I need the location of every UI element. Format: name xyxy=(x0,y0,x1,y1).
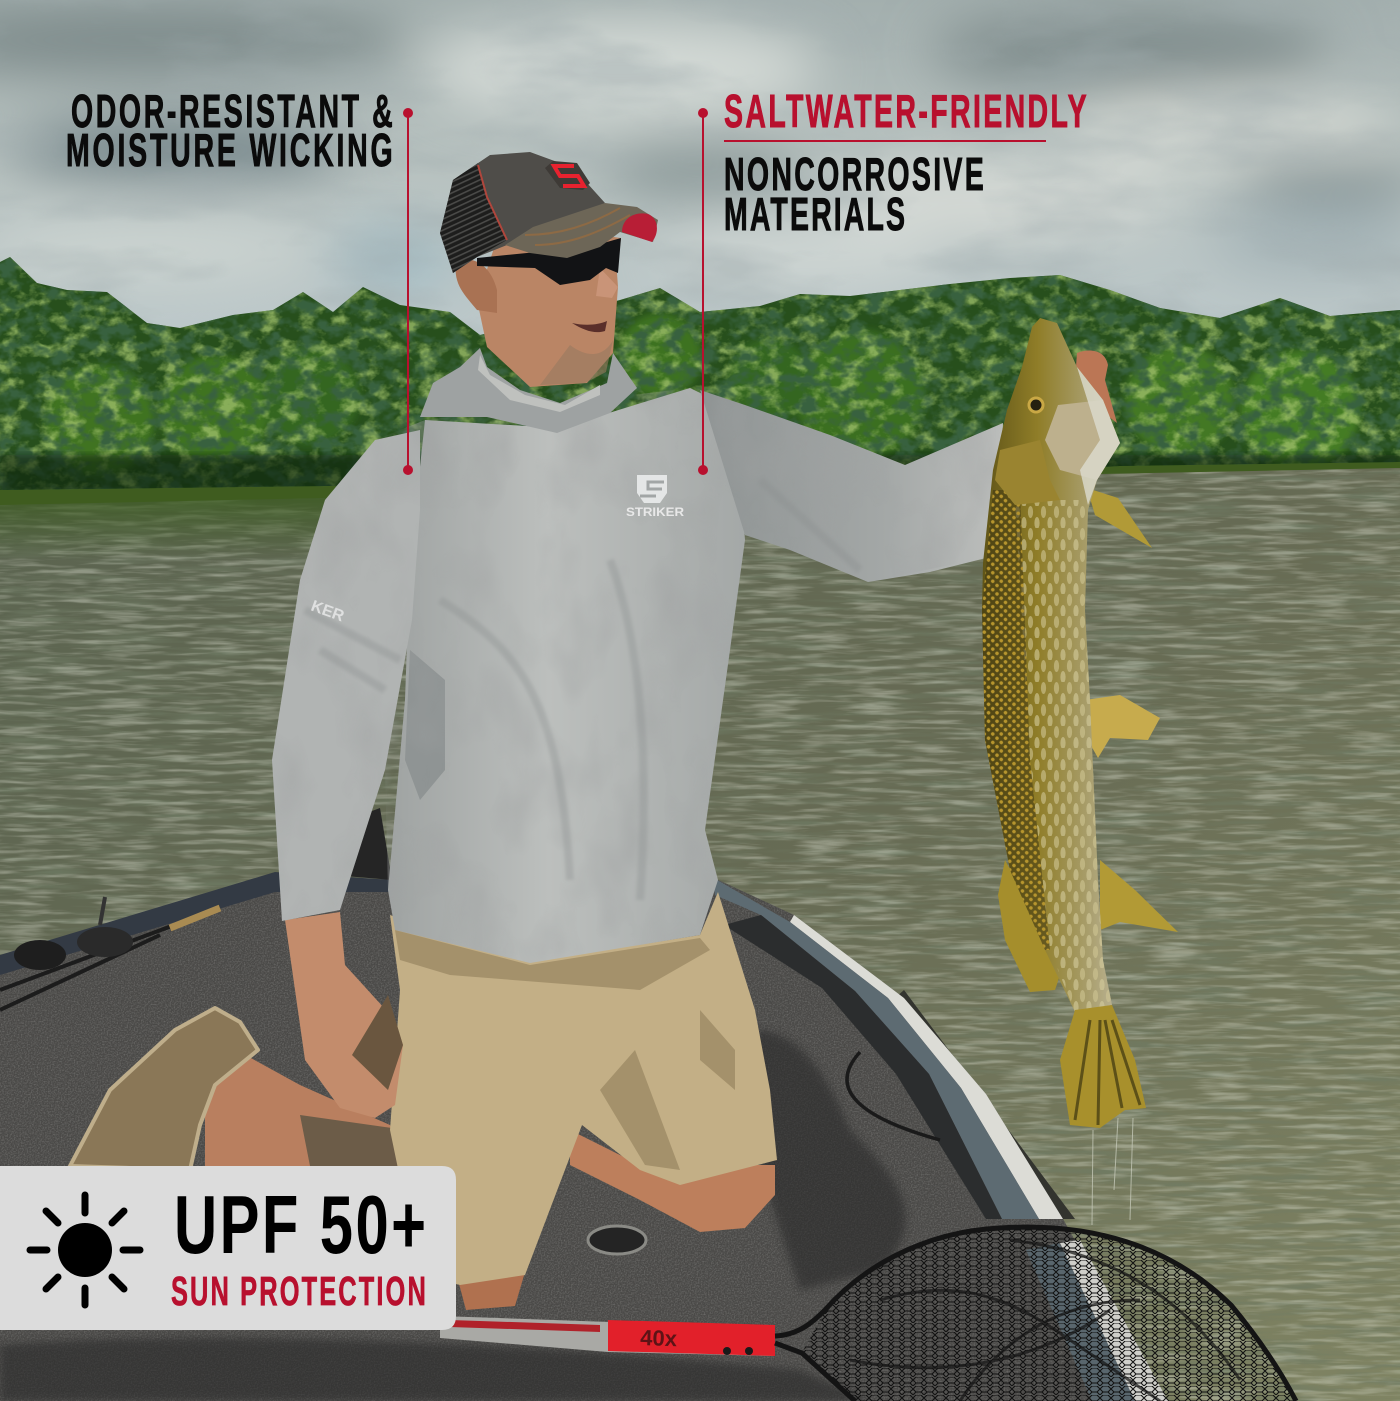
face shading xyxy=(540,340,613,385)
sunglasses xyxy=(477,238,621,285)
callout: noncorrosive materials text: NONCORROSIVE xyxy=(724,149,984,201)
deck hatch xyxy=(588,1226,646,1254)
dark side line xyxy=(895,990,1075,1219)
mesh side panel xyxy=(405,650,445,800)
stowed gear xyxy=(345,808,392,880)
callout: saltwater friendly heading: SALTWATER-FRIENDLY xyxy=(724,86,1087,138)
background: lake water xyxy=(0,465,1400,1401)
belly fin xyxy=(998,860,1065,992)
navy left gunwale xyxy=(0,872,392,975)
callout: noncorrosive materials text xyxy=(724,149,984,241)
back fin xyxy=(1087,488,1152,548)
icon: sun xyxy=(30,1195,140,1305)
hand holding fish xyxy=(1075,351,1117,423)
cap underside red xyxy=(622,213,657,242)
nose xyxy=(596,268,618,298)
fish pale belly edge xyxy=(1077,367,1120,505)
cap mesh back xyxy=(440,163,507,273)
deck shadow xyxy=(0,1030,906,1401)
bill stitching xyxy=(525,208,630,245)
callout: odor resistant heading xyxy=(66,86,393,177)
near shoe xyxy=(70,1008,258,1170)
ear xyxy=(456,259,497,313)
gaiter mesh fold xyxy=(478,355,600,412)
shirt torso xyxy=(388,388,745,963)
pectoral fin xyxy=(1085,695,1160,758)
callout underline xyxy=(724,140,1046,142)
near forearm and hand xyxy=(285,912,403,1118)
background: cloudy sky xyxy=(0,0,1400,340)
shirt folds xyxy=(305,480,860,900)
fishing rods on deck xyxy=(0,897,220,1010)
northern pike xyxy=(982,318,1178,1225)
panel: UPF sun protection badge xyxy=(0,1166,456,1330)
neck and face xyxy=(477,235,621,387)
khaki shorts xyxy=(390,892,777,1285)
background: far shoreline xyxy=(0,458,1400,505)
callout: odor resistant heading: ODOR-RESISTANT & xyxy=(71,86,393,138)
fish golden flank xyxy=(982,490,1050,950)
landing net xyxy=(775,1227,1296,1401)
rail lower section xyxy=(1026,1243,1161,1401)
fish eye xyxy=(1029,398,1043,412)
sleeve logo: KER xyxy=(309,598,347,625)
UPF rating: UPF 50+ xyxy=(174,1180,426,1271)
shirt chest logo xyxy=(626,475,684,519)
dark rail edge xyxy=(724,915,1002,1219)
tail rays xyxy=(1075,1020,1140,1125)
sun protection label: SUN PROTECTION xyxy=(171,1269,426,1315)
cap xyxy=(440,152,658,273)
angler xyxy=(70,152,1005,1310)
mouth xyxy=(572,321,607,332)
cap bill xyxy=(505,203,658,258)
fish tail xyxy=(1060,1005,1146,1128)
callout: noncorrosive materials text: MATERIALS xyxy=(724,189,905,241)
callout line: odor resistant xyxy=(403,108,413,475)
fish head plate xyxy=(1045,400,1120,480)
blue steel rail xyxy=(712,877,1039,1219)
shoe held in hand xyxy=(352,995,403,1090)
water drips xyxy=(1092,1118,1133,1225)
callout line: saltwater friendly xyxy=(698,108,708,475)
callout: odor resistant heading: MOISTURE WICKING xyxy=(66,125,393,177)
shorts shadow folds xyxy=(395,930,735,1170)
boat deck xyxy=(0,808,1170,1401)
shirt wrinkles xyxy=(377,390,994,949)
fish gill cheek xyxy=(995,440,1060,505)
fish body xyxy=(982,318,1120,1012)
background: tree line xyxy=(0,250,1400,495)
cap seam xyxy=(478,165,507,240)
deck cable xyxy=(847,1052,940,1140)
anal fin xyxy=(1100,860,1178,932)
muddy knee patch xyxy=(300,1115,407,1166)
red measuring handle xyxy=(440,1316,775,1356)
near shin below shorts xyxy=(458,1272,525,1310)
cap S patch xyxy=(545,161,590,190)
near calf xyxy=(205,1052,407,1180)
fish scale spots xyxy=(1015,500,1112,1012)
near sleeve xyxy=(272,430,420,921)
hood and neck gaiter xyxy=(420,348,637,433)
far leg and knee xyxy=(570,1130,775,1232)
far sleeve xyxy=(700,390,1003,582)
shirt chest logo: STRIKER xyxy=(626,505,684,519)
white rail stripe xyxy=(790,915,1063,1219)
red measuring handle: 40x xyxy=(640,1325,678,1351)
